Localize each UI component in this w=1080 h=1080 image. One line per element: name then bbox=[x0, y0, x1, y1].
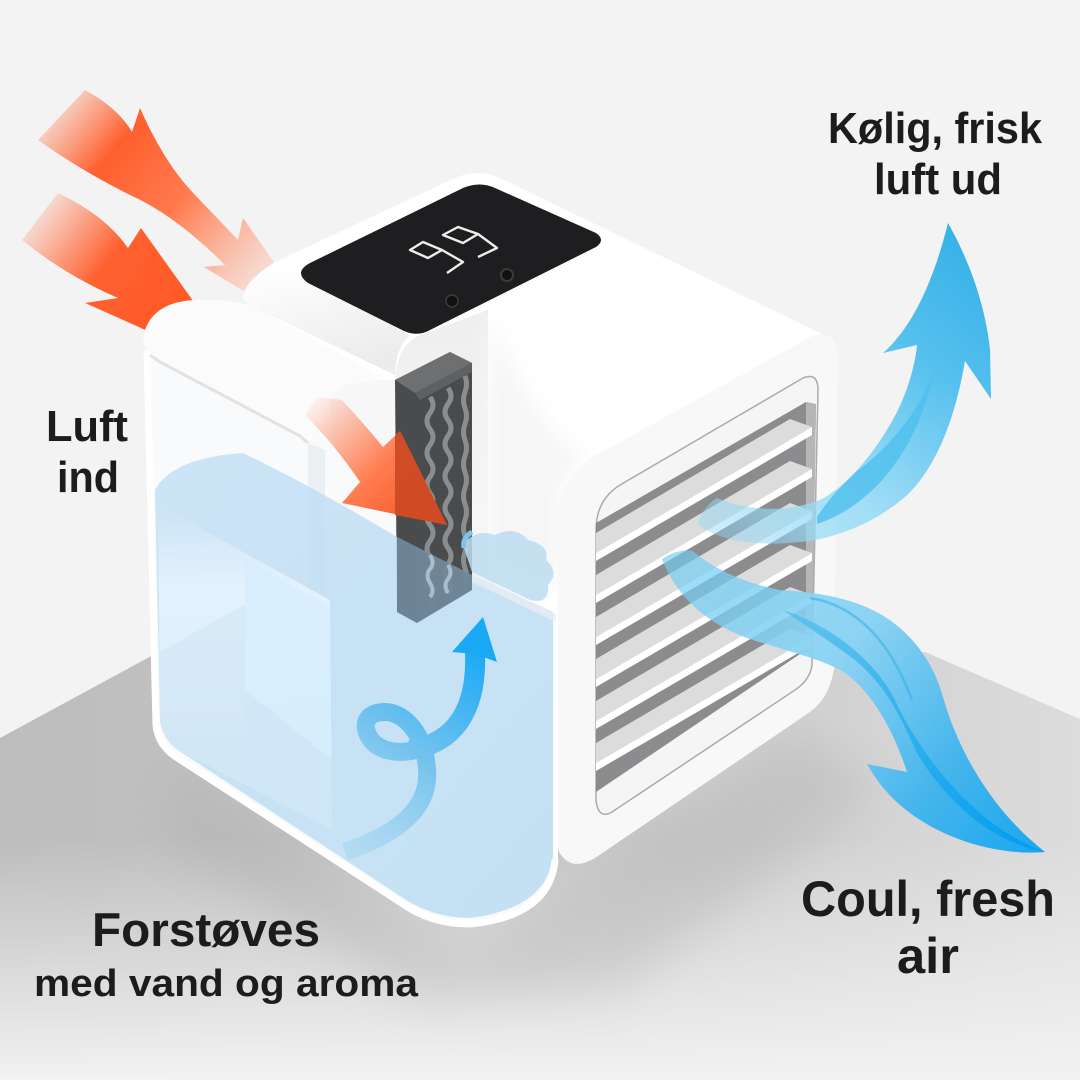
cooler top and side body bbox=[243, 173, 838, 840]
pale lower water bbox=[158, 505, 332, 830]
label: cool fresh air: Coul, fresh bbox=[801, 871, 1055, 927]
arrow: air into filter bbox=[305, 397, 447, 525]
label: atomised subheading: med vand og aroma bbox=[34, 963, 419, 1005]
arrow: swirl up from water bbox=[345, 617, 497, 852]
display buttons bbox=[501, 269, 513, 281]
label: air in: Luft bbox=[46, 402, 128, 451]
tank lid bbox=[143, 299, 385, 443]
arrow: cool air down bbox=[662, 550, 1045, 853]
lid lower lip bbox=[150, 355, 308, 443]
display digits bbox=[410, 227, 497, 273]
tank glass bbox=[146, 350, 556, 925]
label: cool fresh air second line: air bbox=[897, 928, 959, 984]
tank white outline bbox=[147, 350, 555, 924]
floor seen through water bbox=[160, 604, 332, 830]
tank right edge bbox=[554, 610, 558, 860]
display panel bbox=[301, 184, 601, 334]
floor surface bbox=[0, 652, 1080, 1080]
label: atomised heading: Forstøves bbox=[92, 903, 320, 956]
mist cloud bbox=[463, 531, 556, 622]
submerged filter bbox=[397, 537, 472, 623]
water bbox=[155, 453, 553, 918]
air cooler unit bbox=[34, 104, 1055, 1005]
inner band bbox=[817, 368, 935, 524]
side wall shade bbox=[488, 310, 590, 590]
vent frame bbox=[558, 334, 838, 864]
water tank bbox=[143, 299, 556, 925]
arrow: air in upper bbox=[38, 90, 276, 292]
label: air in second line: ind bbox=[57, 453, 119, 502]
column front bbox=[395, 310, 488, 600]
floor shadow bbox=[170, 730, 880, 1000]
label: cool fresh air out second line: luft ud bbox=[874, 155, 1002, 204]
inner band bbox=[783, 610, 1045, 852]
label: cool fresh air out (Danish): Kølig, frisk bbox=[828, 104, 1042, 153]
arrow: cool air up bbox=[697, 223, 991, 544]
rear post bbox=[308, 443, 325, 612]
top front shading bbox=[243, 272, 410, 375]
arrow: air in lower bbox=[22, 193, 196, 332]
bright column in water bbox=[245, 560, 332, 830]
vent slats bbox=[596, 402, 816, 792]
wet streak bbox=[472, 572, 556, 622]
filter cartridge bbox=[395, 352, 472, 623]
lid ghost curve bbox=[330, 380, 395, 470]
thin streak bbox=[810, 598, 912, 700]
